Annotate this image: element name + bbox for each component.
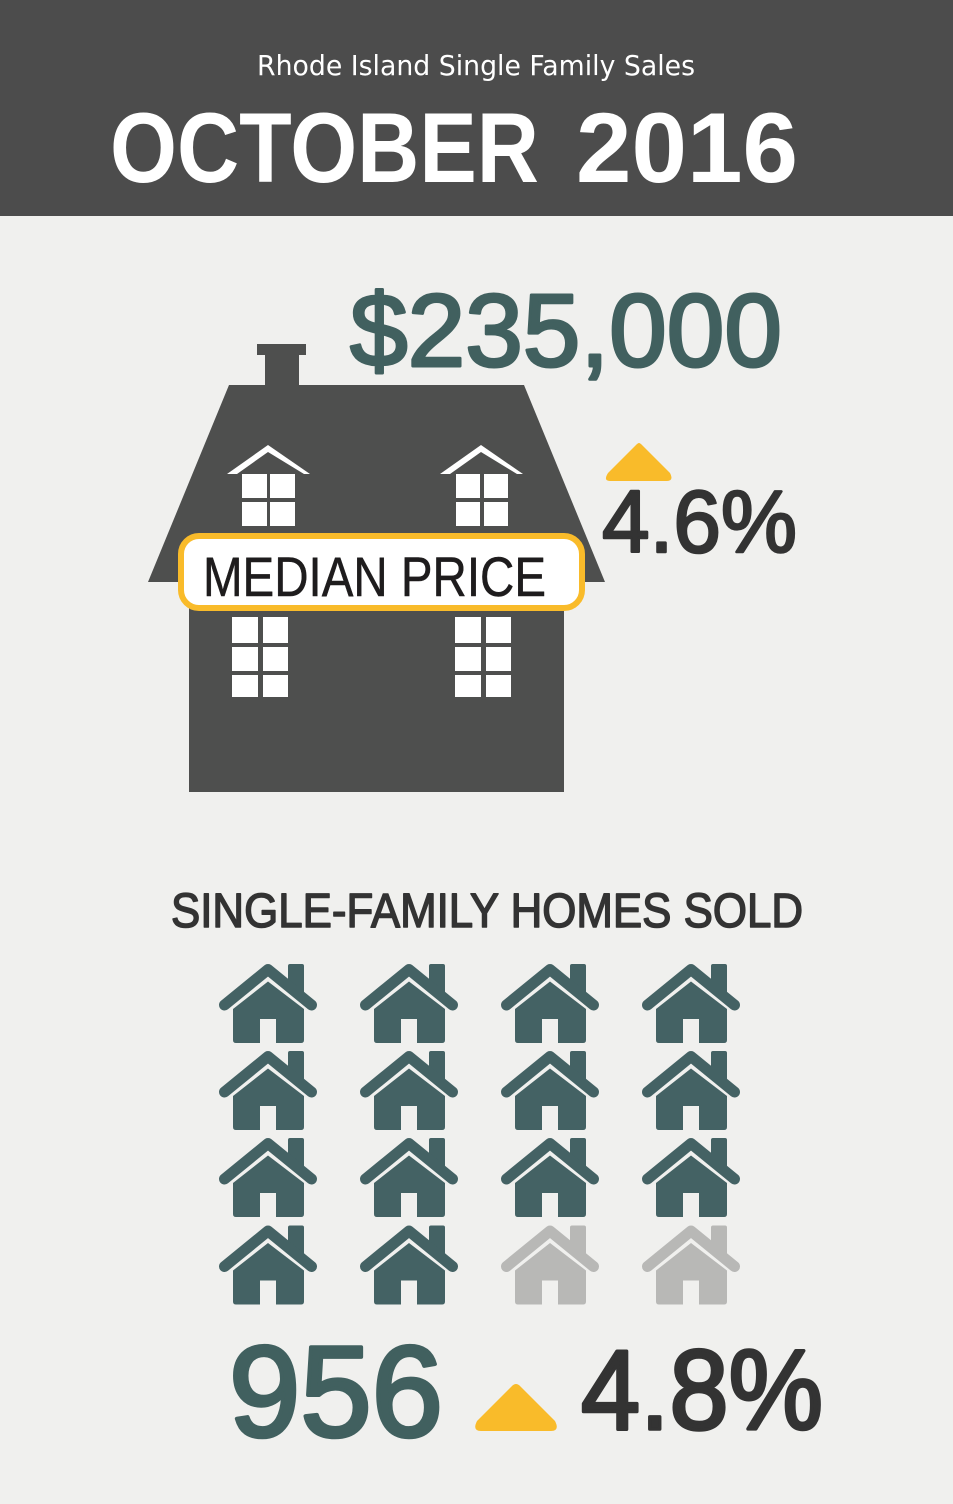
chimney: [257, 344, 306, 387]
homes row 4 greyed: [506, 1226, 734, 1304]
icon: up arrow, homes sold: [475, 1384, 557, 1431]
homes sold value: 956: [229, 1320, 443, 1464]
subtitle: Rhode Island Single Family Sales: [257, 49, 695, 82]
median price label: MEDIAN PRICE: [203, 545, 546, 608]
house icon grid: [224, 964, 734, 1304]
median price value: $235,000: [350, 273, 782, 388]
lower right window: [455, 617, 511, 697]
homes sold change: 4.8%: [581, 1327, 823, 1453]
homes row 2: [224, 1051, 734, 1130]
right dormer window: [440, 445, 523, 526]
icon: large house: [148, 344, 605, 792]
lower left window: [232, 617, 288, 697]
homes sold heading: SINGLE-FAMILY HOMES SOLD: [171, 885, 803, 938]
roof: [148, 385, 605, 582]
median price change: 4.6%: [602, 472, 797, 571]
homes row 1: [224, 964, 734, 1043]
homes row 4 filled: [224, 1226, 452, 1304]
icon: up arrow, median price: [606, 443, 671, 481]
left dormer window: [227, 445, 310, 526]
title: 2016: [576, 92, 798, 203]
house body: [189, 580, 564, 792]
homes row 3: [224, 1138, 734, 1217]
title: OCTOBER: [110, 92, 539, 203]
header band: [0, 0, 953, 216]
